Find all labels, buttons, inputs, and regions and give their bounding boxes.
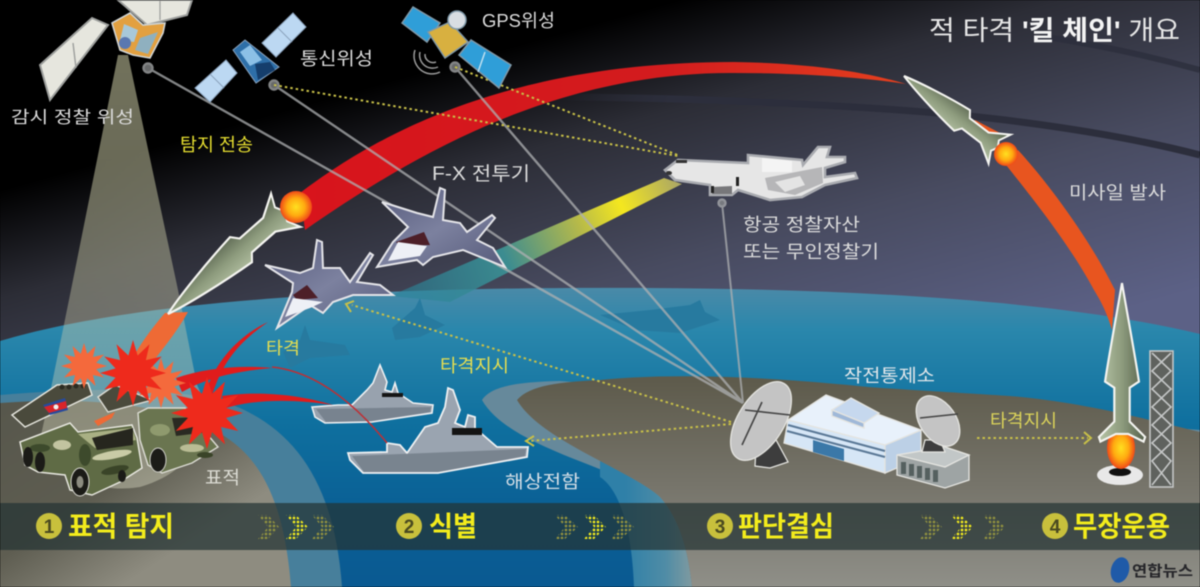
operations control centre xyxy=(718,371,969,488)
label: warships: 해상전함 xyxy=(505,472,580,492)
label: airborne recon line 2: 또는 무인정찰기 xyxy=(743,242,879,262)
step 2: 식별 xyxy=(429,511,477,542)
missile on launch xyxy=(1099,283,1145,442)
gray data links xyxy=(144,62,743,403)
label: strike order (land): 타격지시 xyxy=(990,411,1057,431)
flame: ascending missile xyxy=(280,191,312,223)
jet shadows on sea xyxy=(283,298,720,368)
step 2 xyxy=(396,511,477,542)
satellite dish left xyxy=(718,371,804,471)
step 3: 판단결심 xyxy=(738,511,834,542)
building xyxy=(784,395,921,473)
rocket truck rear xyxy=(98,385,218,473)
label: communications satellite: 통신위성 xyxy=(300,49,373,69)
ocean xyxy=(0,288,1200,587)
atmosphere arcs xyxy=(560,36,1200,155)
launch tower xyxy=(1150,351,1173,487)
satellite: surveillance xyxy=(40,0,192,100)
missile trajectory: red arc xyxy=(300,62,906,230)
explosion small left xyxy=(61,343,107,389)
missile in flight: ascending xyxy=(153,194,300,331)
launch pad ring xyxy=(1097,465,1143,485)
bottom process bar xyxy=(0,503,1200,550)
flame: descending missile xyxy=(994,142,1018,166)
label: strike order (sea): 타격지시 xyxy=(440,356,509,376)
label: missile launch: 미사일 발사 xyxy=(1069,183,1166,203)
small annex building xyxy=(897,447,969,488)
label: detection transmit: 탐지 전송 xyxy=(180,135,253,155)
target trucks xyxy=(12,383,218,496)
label: target: 표적 xyxy=(205,468,240,488)
satellite dish right xyxy=(907,388,969,454)
missile trajectory: orange tail to target xyxy=(130,312,188,372)
land: left coast band xyxy=(0,390,342,587)
launch flame xyxy=(1107,427,1135,469)
chevrons 2 xyxy=(555,515,634,539)
explosion lower xyxy=(171,377,243,449)
satellite: GPS xyxy=(402,7,511,88)
chevrons 1 xyxy=(258,515,334,539)
label: F-X fighter: F-X 전투기 xyxy=(432,163,530,185)
label: airborne recon line 1: 항공 정찰자산 xyxy=(743,215,860,235)
label: GPS satellite: GPS위성 xyxy=(482,11,555,31)
satellite: communications xyxy=(195,13,306,102)
warship lower xyxy=(348,388,528,473)
explosion small right xyxy=(136,358,186,408)
explosion middle xyxy=(100,340,166,406)
land: right coast band xyxy=(482,381,1200,587)
explosions xyxy=(61,340,243,449)
step 4: 4 xyxy=(1050,517,1061,538)
step 3: 3 xyxy=(715,517,725,538)
logo: Yonhap News: 연합뉴스 xyxy=(1132,563,1193,580)
fighter jet lower xyxy=(265,240,393,328)
land: right shore xyxy=(517,376,1200,587)
label: operations control: 작전통제소 xyxy=(844,366,935,386)
missile trajectory: descending orange arc xyxy=(1006,150,1115,330)
yellow dotted command links xyxy=(274,67,1091,446)
rocket truck front xyxy=(12,383,142,496)
land: inner lagoon band xyxy=(600,457,692,587)
land: left shore xyxy=(0,401,291,587)
aircraft: airborne reconnaissance xyxy=(665,147,857,200)
warship upper xyxy=(312,365,433,423)
reconnaissance beam from aircraft to jets xyxy=(390,178,682,302)
attack trails: red xyxy=(94,322,387,443)
reconnaissance beam xyxy=(40,55,204,489)
step 1: 표적 탐지 xyxy=(68,511,174,542)
logo: Yonhap News xyxy=(1108,555,1193,585)
step 1: 1 xyxy=(44,517,55,538)
fighter jet upper xyxy=(377,188,505,267)
label: strike: 타격 xyxy=(266,339,300,358)
missile in flight: descending xyxy=(893,62,1011,164)
missile trajectory: short middle segment xyxy=(970,120,1000,140)
chevrons 3 xyxy=(920,515,1005,539)
step 2: 2 xyxy=(404,517,414,538)
title: 적 타격 '킬 체인' 개요 xyxy=(929,16,1180,46)
label: surveillance satellite: 감시 정찰 위성 xyxy=(11,108,134,127)
step 4: 무장운용 xyxy=(1073,511,1170,542)
